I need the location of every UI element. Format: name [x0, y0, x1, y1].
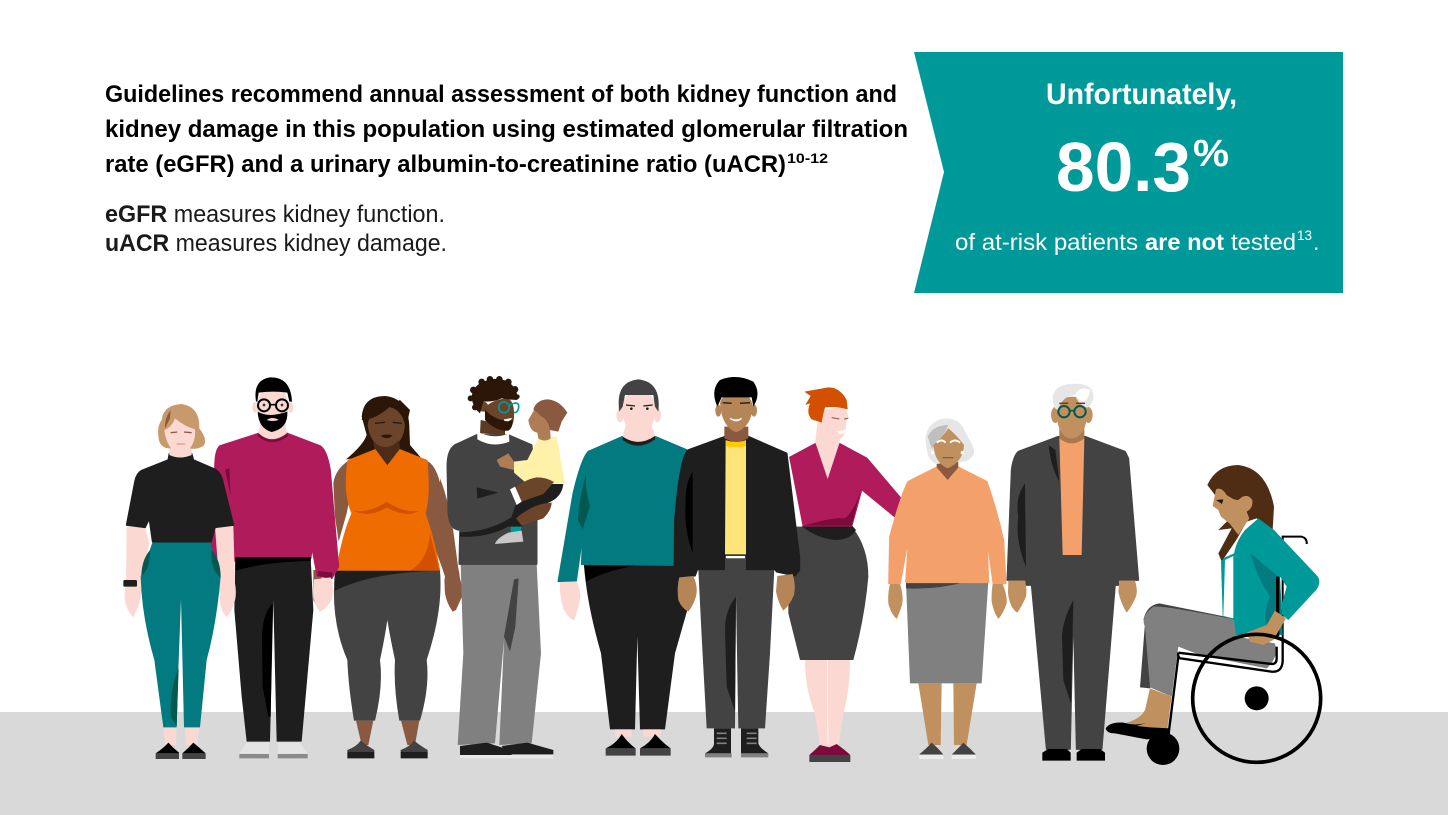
person: man holding child: [440, 376, 567, 758]
callout banner: .: [1313, 229, 1319, 255]
jacket: [1221, 518, 1319, 635]
person: woman in orange top: [313, 396, 460, 758]
callout banner: Unfortunately,: [1046, 78, 1237, 111]
headline: Guidelines recommend annual assessment of both kidney function and: [105, 81, 897, 108]
person: bearded man in magenta sweater: [209, 377, 338, 758]
headline: 10-12: [787, 151, 828, 166]
wheel: [1193, 634, 1321, 762]
person: man in teal sweater: [558, 379, 687, 756]
headline: rate (eGFR) and a urinary albumin-to-creatinine ratio (uACR): [105, 151, 786, 178]
caster wheel: [1147, 732, 1179, 765]
person: man in black jacket: [674, 377, 799, 757]
callout banner: of at-risk patients: [955, 229, 1138, 255]
person: older woman in peach sweater: [888, 419, 1007, 759]
headline: [105, 81, 908, 178]
floor band: [0, 712, 1448, 815]
person: woman in wheelchair: [1106, 465, 1321, 765]
definitions text block: uACR measures kidney damage.: [105, 230, 447, 257]
person: older man in grey suit: [1007, 384, 1138, 761]
definitions text block: [105, 201, 447, 257]
callout banner: are not: [1145, 229, 1224, 255]
hub: [1245, 686, 1269, 710]
person: woman in magenta blouse: [788, 387, 901, 762]
callout banner: [914, 52, 1343, 293]
wheelchair frame: [1169, 640, 1283, 733]
callout banner: %: [1193, 133, 1229, 175]
callout banner: 13: [1297, 228, 1312, 243]
person: woman in teal trousers: [123, 404, 236, 759]
callout banner: 80.3: [1056, 128, 1191, 206]
headline: kidney damage in this population using estimated glomerular filtration: [105, 116, 908, 143]
face: [1213, 489, 1252, 535]
hair: [1207, 465, 1274, 562]
definitions text block: eGFR measures kidney function.: [105, 201, 445, 228]
callout banner: tested: [1231, 229, 1296, 255]
wheelchair back handle: [1283, 537, 1307, 640]
hand: [1247, 611, 1286, 645]
